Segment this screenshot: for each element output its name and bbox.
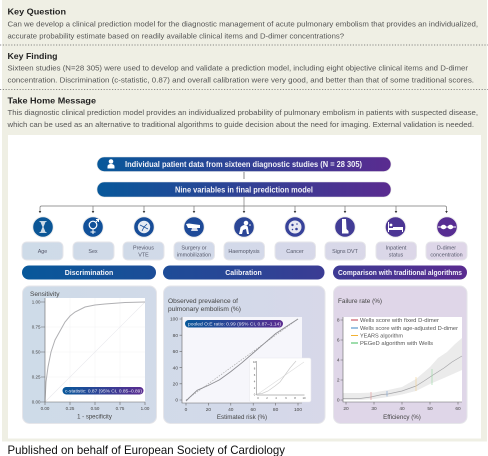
calibration curve — [186, 319, 298, 401]
text block: key finding — [8, 51, 474, 84]
inset chart: 8 — [254, 366, 256, 370]
variable labels: Sex — [88, 249, 98, 255]
variable labels: Age — [38, 249, 47, 255]
icon: previous VTE clot — [134, 217, 154, 237]
variable labels: Cancer — [286, 249, 304, 255]
icon: age hourglass — [33, 217, 53, 237]
panel: discrimination ROC chart: 0.00 — [41, 406, 50, 411]
text block: take home message: which can be used as an alternative to traditional algorithms to guide decision about the need for imaging. External validation is needed. — [6, 120, 474, 129]
panel: failure rate chart: 8 — [337, 318, 340, 324]
panel: calibration chart: 80 — [173, 333, 178, 339]
panel: calibration chart: 20 — [173, 382, 178, 388]
confidence band — [343, 338, 462, 400]
c-statistic pill: c-statistic: 0.87 (95% CI, 0.85–0.89) — [65, 388, 143, 394]
text block: take home message — [6, 96, 478, 129]
variable labels: Signs DVT — [332, 249, 359, 255]
banner: individual patient data — [97, 157, 391, 172]
panel: calibration chart: 20 — [206, 407, 211, 413]
text block: take home message: Take Home Message — [8, 96, 96, 106]
panel: calibration chart: 100 — [170, 317, 178, 323]
panel: calibration chart: 0 — [175, 398, 178, 404]
text block: key question — [8, 6, 478, 40]
inset chart: 10 — [253, 360, 256, 364]
panel: discrimination ROC chart: 1.00 — [141, 406, 150, 411]
icon: leg DVT — [335, 217, 355, 237]
banner: nine variables: Nine variables in final prediction model — [175, 186, 313, 194]
failure curve — [343, 356, 462, 398]
panel: failure rate chart: 2 — [337, 378, 340, 384]
text block: key question: Key Question — [8, 6, 66, 16]
inset chart — [250, 358, 311, 402]
text block: key question: accurate probability estimate based on readily available clinical items and D-dimer concentrations? — [8, 32, 344, 40]
variable labels: Haemoptysis — [228, 249, 260, 255]
ROC curve — [45, 302, 145, 402]
panel: failure rate chart: 4 — [337, 358, 340, 364]
algorithm markers — [371, 369, 432, 400]
panel: calibration chart — [164, 286, 325, 424]
panel: discrimination ROC chart: 0.00 — [32, 400, 41, 404]
panel: discrimination ROC chart — [22, 286, 156, 424]
inset chart: 0 — [254, 392, 256, 396]
variable labels: D-dimer — [437, 246, 456, 252]
variable labels: Surgery or — [181, 246, 207, 252]
panel: calibration chart: 80 — [273, 407, 279, 413]
legend — [351, 318, 458, 347]
banner: nine variables — [97, 182, 391, 197]
panel: calibration chart: Observed prevalence of — [168, 298, 238, 305]
panel: discrimination ROC chart: Sensitivity — [30, 292, 60, 298]
variable labels: Previous — [133, 246, 154, 252]
panel: discrimination ROC chart: 0.75 — [116, 406, 125, 411]
panel: calibration chart: 0 — [185, 407, 188, 413]
legend: PEGeD algorithm with Wells — [360, 341, 433, 347]
section header: calibration: Calibration — [225, 270, 262, 277]
variable labels: concentration — [430, 252, 463, 258]
text block: key question: Can we develop a clinical prediction model for the diagnostic management of acute pulmonary embolism that provides an individualized, — [8, 20, 478, 28]
panel: failure rate chart: 6 — [337, 338, 340, 344]
legend: Wells score with age-adjusted D-dimer — [360, 326, 458, 332]
variable labels: VTE — [138, 252, 149, 258]
variable labels: Inpatient — [386, 246, 407, 252]
pooled O:E pill: pooled O:E ratio: 0.99 (95% CI, 0.87–1.14) — [188, 322, 282, 326]
panel: failure rate chart — [334, 286, 467, 424]
panel: calibration chart: 60 — [251, 407, 256, 413]
legend: YEARS algorithm — [360, 334, 404, 340]
variable labels — [22, 242, 467, 260]
panel: central illustration — [8, 135, 481, 438]
pooled O:E pill — [185, 320, 283, 328]
panel: discrimination ROC chart: 0.25 — [66, 406, 75, 411]
inset chart: 0 — [257, 396, 259, 400]
legend: Wells score with fixed D-dimer — [360, 318, 439, 324]
panel: failure rate chart: 30 — [371, 406, 377, 412]
inset chart: 6 — [254, 373, 256, 377]
icon: sex symbol — [83, 217, 103, 237]
inset chart: 2 — [254, 386, 256, 390]
icon: D-dimer — [437, 217, 457, 237]
inset chart: 6 — [285, 396, 287, 400]
inset chart: 8 — [294, 396, 296, 400]
section header: discrimination: Discrimination — [65, 270, 113, 277]
section header: calibration — [163, 266, 324, 280]
panel: calibration chart: 40 — [173, 365, 178, 371]
variable labels: status — [389, 252, 403, 258]
inset chart: 4 — [254, 380, 256, 384]
panel: failure rate chart: Failure rate (%) — [338, 298, 382, 305]
icon: haemoptysis person coughing — [234, 217, 254, 237]
section header: comparison: Comparison with traditional algorithms — [338, 270, 462, 277]
icon: surgery table — [184, 217, 204, 237]
inset chart: 10 — [302, 396, 306, 400]
panel: failure rate chart: 50 — [427, 406, 433, 412]
panel: failure rate chart: 40 — [399, 406, 405, 412]
section header: discrimination — [22, 266, 156, 280]
panel: calibration chart: 40 — [228, 407, 234, 413]
section header: comparison — [333, 266, 467, 280]
panel: failure rate chart: 0 — [337, 398, 340, 404]
icon: inpatient bed — [385, 217, 406, 237]
arrows: tree to nine variables — [39, 197, 448, 213]
banner: individual patient data: Individual patient data from sixteen diagnostic studies (N = 28 305) — [125, 160, 362, 169]
panel: discrimination ROC chart: 0.25 — [32, 374, 41, 380]
panel: calibration chart: 100 — [294, 407, 302, 413]
arrow: data to variables — [243, 172, 245, 179]
panel: discrimination ROC chart: 0.50 — [32, 350, 41, 354]
inset chart: 4 — [275, 396, 277, 400]
panel: failure rate chart: 20 — [343, 406, 349, 412]
inset chart: 2 — [266, 396, 268, 400]
panel: calibration chart: 60 — [173, 349, 178, 355]
icon: cancer cell — [285, 217, 305, 237]
panel: calibration chart: pulmonary embolism (%) — [168, 306, 241, 313]
panel: failure rate chart: Efficiency (%) — [383, 414, 421, 421]
text block: key finding: Key Finding — [8, 51, 58, 61]
variable labels: immobilization — [177, 252, 211, 258]
panel: discrimination ROC chart: 0.75 — [32, 324, 41, 330]
panel: discrimination ROC chart: 0.50 — [91, 406, 100, 411]
text block: take home message: This diagnostic clinical prediction model provides an individualized probability of pulmonary embolism in patients with suspected disease, — [8, 108, 478, 117]
panel: discrimination ROC chart: 1 - specificity — [77, 414, 112, 420]
panel: failure rate chart: 60 — [455, 406, 461, 412]
panel: calibration chart: Estimated risk (%) — [217, 414, 267, 421]
text block: key finding: Sixteen studies (N=28 305) were used to develop and validate a prediction model, including eight objective clinical items and D-dimer — [8, 64, 469, 72]
panel: discrimination ROC chart: 1.00 — [32, 300, 41, 304]
text block: key finding: concentration. Discrimination (c-statistic, 0.87) and overall calibration were very good, and better than that of some traditional scores. — [8, 76, 474, 84]
